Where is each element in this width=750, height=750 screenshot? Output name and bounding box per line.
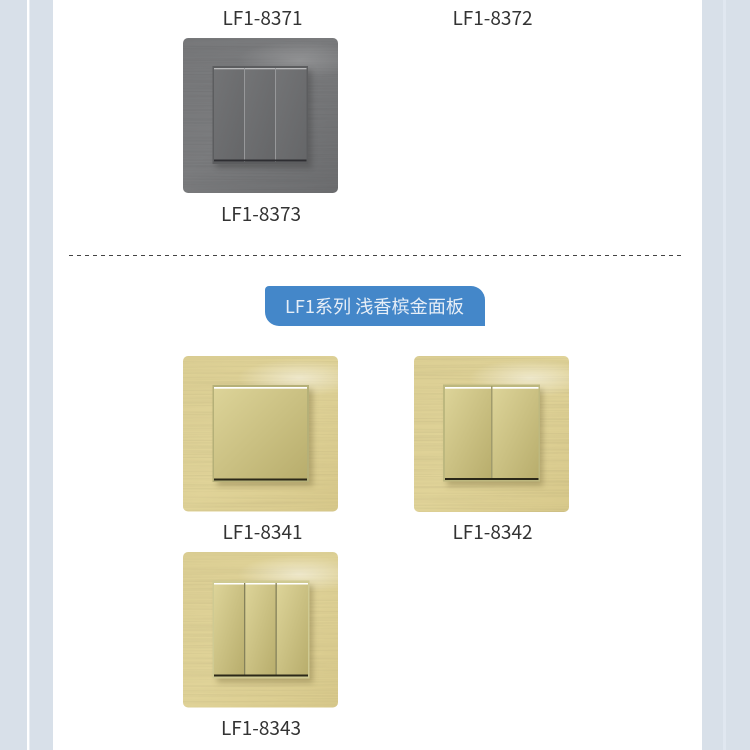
right side bands: [702, 0, 750, 750]
section banner: LF1系列 浅香槟金面板: [285, 293, 464, 319]
dashed divider: [69, 254, 681, 256]
label: LF1-8342: LF1-8342: [452, 518, 533, 545]
switch panel: gold two-gang: [414, 356, 569, 512]
label: LF1-8343: LF1-8343: [221, 714, 301, 741]
label: LF1-8372: LF1-8372: [452, 4, 533, 31]
switch panel: gold three-gang: [183, 552, 338, 708]
label: LF1-8373: LF1-8373: [221, 200, 301, 227]
section banner: [265, 286, 485, 326]
switch panel: gold one-gang: [183, 356, 338, 512]
label: LF1-8371: LF1-8371: [222, 4, 303, 31]
label: LF1-8341: LF1-8341: [222, 518, 303, 545]
switch panel: grey three-gang: [183, 38, 338, 193]
left side bands: [0, 0, 53, 750]
